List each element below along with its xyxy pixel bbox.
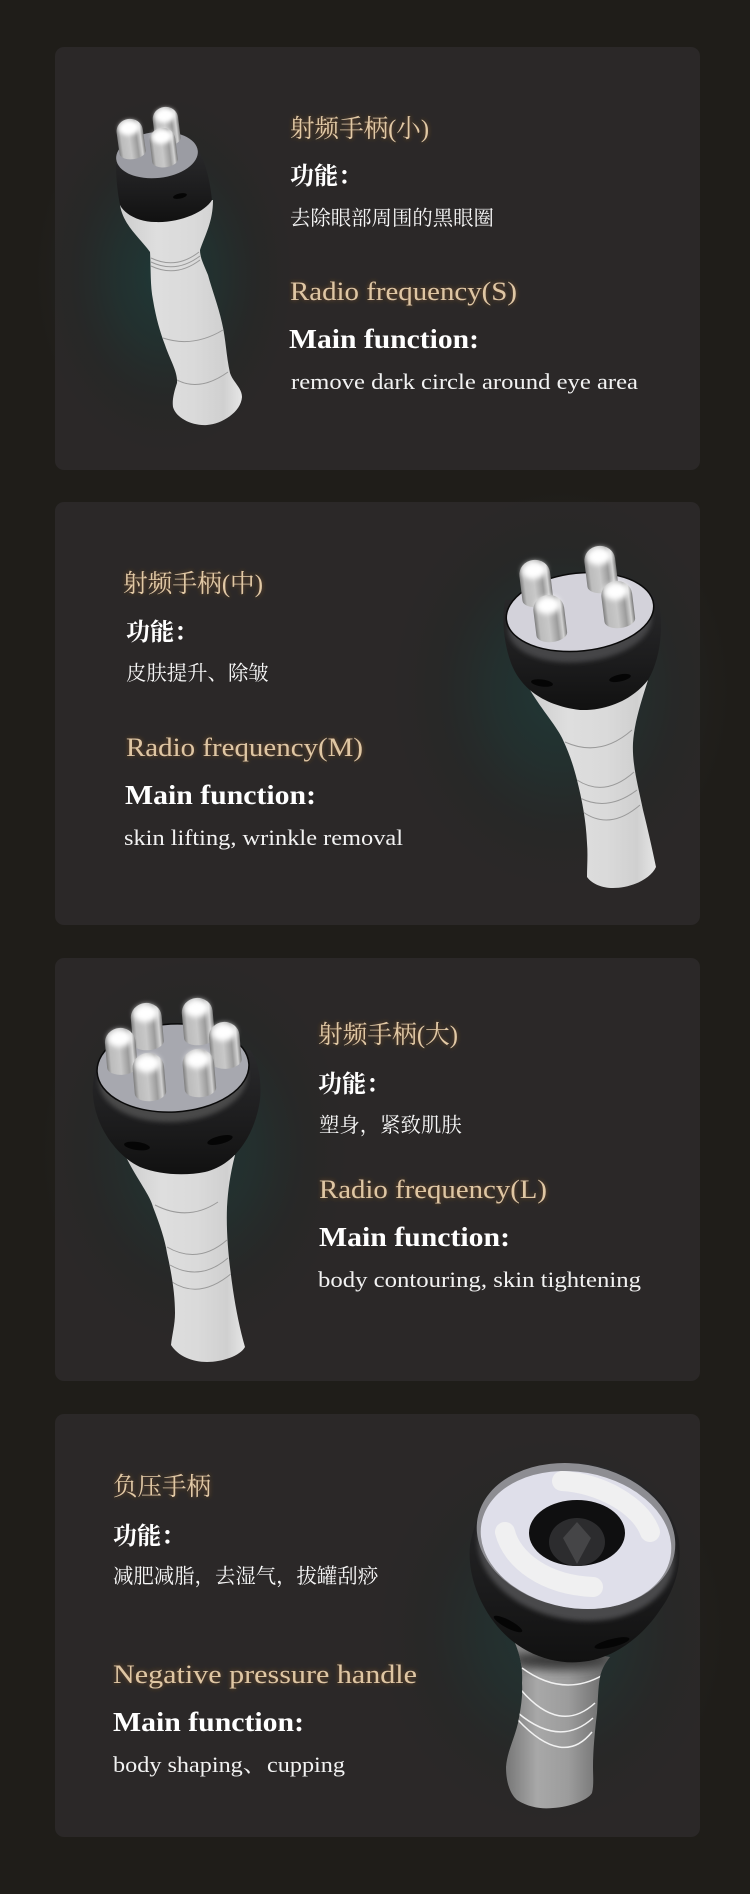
function label en: Main function: <box>319 1222 510 1252</box>
description cn: 减肥减脂，去湿气，拔罐刮痧 <box>113 1565 380 1588</box>
teal glow <box>390 490 730 890</box>
function label en: Main function: <box>113 1707 304 1737</box>
function label cn: 功能： <box>126 619 198 646</box>
panel: RF handle large <box>40 955 700 1381</box>
icon: small RF handle <box>114 105 242 425</box>
description cn: 塑身，紧致肌肤 <box>319 1114 462 1137</box>
panel: RF handle medium <box>55 490 730 925</box>
panel: negative pressure handle <box>55 1414 725 1837</box>
function label en: Main function: <box>289 324 479 354</box>
title cn: 射频手柄(中) <box>123 570 263 598</box>
function label cn: 功能： <box>290 163 362 190</box>
teal glow <box>375 1435 725 1825</box>
function label cn: 功能： <box>318 1071 390 1098</box>
description en: body contouring, skin tightening <box>318 1267 641 1292</box>
title en: Radio frequency(S) <box>290 277 517 306</box>
title cn: 射频手柄(大) <box>318 1021 458 1049</box>
function label en: Main function: <box>125 780 316 810</box>
icon: large RF handle <box>93 997 261 1362</box>
description en: body shaping、cupping <box>113 1752 345 1777</box>
title cn: 射频手柄(小) <box>290 115 429 143</box>
panel background <box>55 958 700 1381</box>
panel background <box>55 47 700 470</box>
description en: remove dark circle around eye area <box>291 369 638 394</box>
teal glow <box>40 955 350 1345</box>
icon: negative pressure handle <box>465 1448 687 1808</box>
title cn: 负压手柄 <box>113 1473 211 1501</box>
teal glow <box>35 95 295 455</box>
panel: RF handle small <box>35 47 700 470</box>
description cn: 皮肤提升、除皱 <box>126 662 269 685</box>
title en: Negative pressure handle <box>113 1660 417 1689</box>
description en: skin lifting, wrinkle removal <box>124 825 403 850</box>
panel background <box>55 502 700 925</box>
panel background <box>55 1414 700 1837</box>
function label cn: 功能： <box>113 1523 185 1550</box>
title en: Radio frequency(L) <box>319 1175 547 1204</box>
icon: medium RF handle <box>502 544 661 888</box>
description cn: 去除眼部周围的黑眼圈 <box>290 207 494 230</box>
title en: Radio frequency(M) <box>126 733 363 762</box>
